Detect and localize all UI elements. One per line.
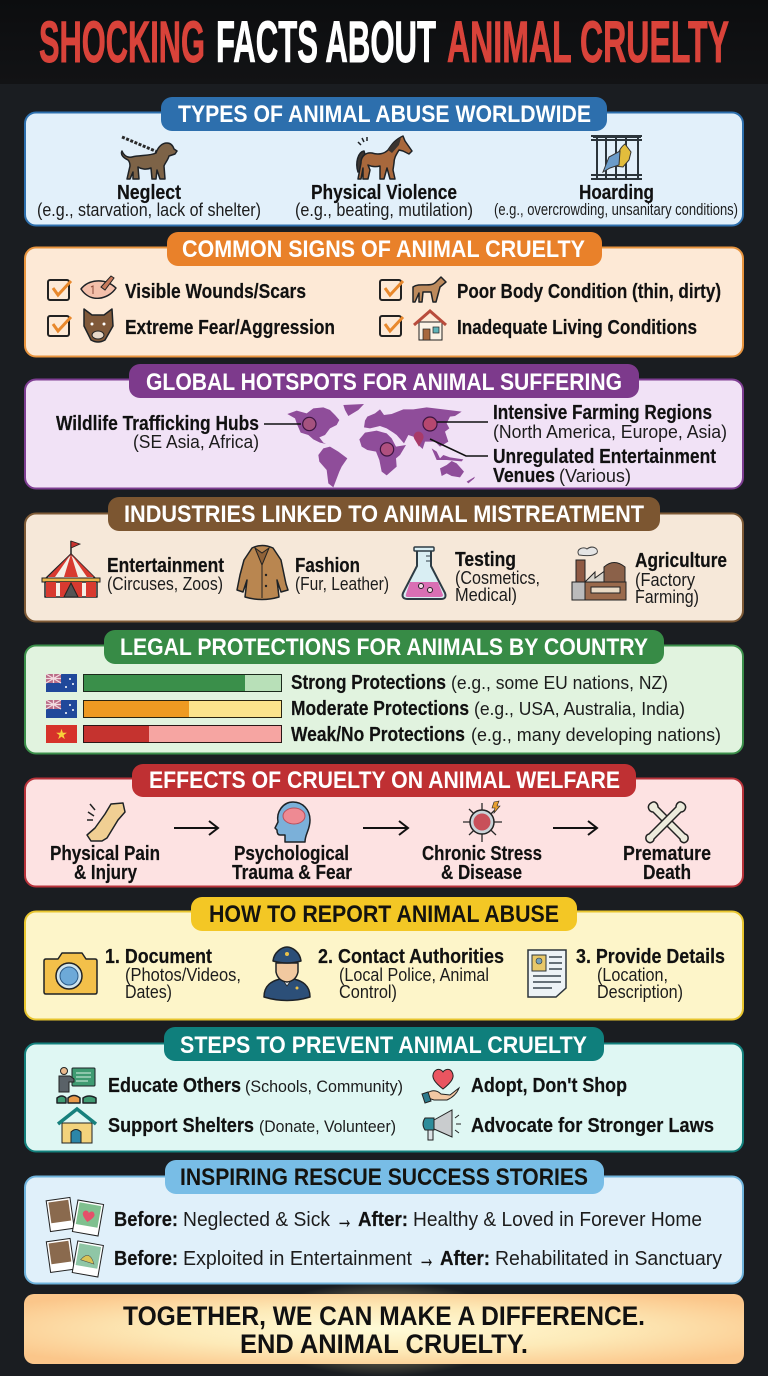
text: weak (291, 724, 721, 746)
text: document: (Photos/Videos, (125, 964, 241, 985)
icon: heart in hand (422, 1069, 459, 1103)
arrow 2 (363, 821, 408, 835)
text: hoarding: Hoarding (579, 182, 654, 204)
icon: caged bird (591, 136, 642, 179)
text: intensive farming: Intensive Farming Regions (493, 402, 712, 424)
text: hoarding (494, 182, 738, 219)
text: premature death: Premature (623, 843, 711, 865)
panel: report (25, 897, 743, 1020)
icon: document form (528, 950, 566, 997)
text: testing: (Cosmetics, (455, 567, 540, 588)
text: psychological (232, 843, 352, 884)
text: educate: (Schools, Community) (245, 1078, 403, 1096)
text: fashion (295, 555, 389, 594)
text: premature death: Death (643, 862, 691, 884)
text: neglect (37, 182, 261, 220)
text: provide details (576, 946, 725, 1002)
text: story 2: → (418, 1242, 435, 1273)
icon: circus tent (42, 541, 100, 597)
text: strong: (e.g., some EU nations, NZ) (451, 672, 668, 693)
text: chronic stress (422, 843, 542, 884)
panel: global hotspots (25, 364, 743, 488)
icon: before and after photos 1 (46, 1197, 104, 1236)
text: testing: Medical) (455, 584, 517, 605)
text: wildlife trafficking: (SE Asia, Africa) (133, 431, 259, 452)
text: wildlife trafficking (56, 413, 259, 452)
icon: megaphone (423, 1110, 461, 1140)
icon: house (414, 311, 446, 340)
arrow 3 (553, 821, 597, 835)
call to action (24, 1282, 744, 1376)
text: entertainment venues: Venues (493, 465, 555, 487)
panel: effects (25, 764, 743, 886)
text: chronic stress: & Disease (441, 862, 522, 884)
panel: common signs (25, 232, 743, 356)
text: story 2: After: (440, 1248, 490, 1270)
text: document: 1. Document (105, 946, 212, 968)
title banner (0, 0, 768, 84)
text: entertainment (107, 555, 224, 594)
icon: thin dog (413, 277, 446, 302)
text: intensive farming: (North America, Europe, Asia) (493, 421, 727, 442)
text: weak: (e.g., many developing nations) (471, 724, 721, 745)
icon: shelter (58, 1109, 96, 1143)
icon: police officer (264, 947, 310, 1000)
text: entertainment: (Circuses, Zoos) (107, 573, 223, 594)
text: psychological: Trauma & Fear (232, 862, 352, 884)
icon: checkbox 2 (48, 316, 71, 336)
call to action: END ANIMAL CRUELTY. (240, 1329, 528, 1359)
text: agriculture (635, 550, 727, 607)
text: story 1: Before: (114, 1209, 178, 1231)
flag: weak (46, 725, 77, 743)
bar: moderate (84, 700, 282, 718)
text: psychological: Psychological (234, 843, 349, 865)
text: story 1: → (336, 1203, 353, 1234)
text: story 1 (114, 1203, 702, 1234)
text: wildlife trafficking: Wildlife Trafficking Hubs (56, 413, 259, 435)
icon: factory (572, 547, 626, 600)
text: physical violence: (e.g., beating, mutilation) (295, 199, 473, 220)
text: wounds: Visible Wounds/Scars (125, 281, 306, 303)
text: moderate: (e.g., USA, Australia, India) (474, 698, 685, 719)
panel: success stories (25, 1160, 743, 1284)
text: support (108, 1115, 396, 1137)
icon: checkbox 1 (48, 280, 71, 300)
heading: report: HOW TO REPORT ANIMAL ABUSE (209, 901, 559, 928)
text: fear: Extreme Fear/Aggression (125, 317, 335, 339)
title banner: SHOCKING (39, 10, 205, 75)
text: contact authorities: (Local Police, Animal (339, 964, 489, 985)
call to action: TOGETHER, WE CAN MAKE A DIFFERENCE. (123, 1301, 645, 1331)
heading: legal: LEGAL PROTECTIONS FOR ANIMALS BY COUNTRY (120, 634, 648, 661)
text: educate: Educate Others (108, 1075, 241, 1097)
text: testing: Testing (455, 549, 516, 571)
text: story 1: After: (358, 1209, 408, 1231)
heading: stories: INSPIRING RESCUE SUCCESS STORIES (180, 1164, 588, 1191)
text: document (105, 946, 241, 1002)
icon: flask (403, 547, 446, 599)
icon: fur coat (237, 546, 288, 600)
icon: crossed bones (646, 802, 688, 843)
panel: legal protections (25, 630, 743, 754)
text: physical pain: Physical Pain (50, 843, 160, 865)
text: entertainment venues: (Various) (559, 465, 631, 486)
text: provide details: Description) (597, 981, 683, 1002)
text: poor body: Poor Body Condition (thin, dirty) (457, 281, 721, 303)
text: strong: Strong Protections (291, 672, 446, 694)
text: fashion: Fashion (295, 555, 360, 577)
text: story 2: Before: (114, 1248, 178, 1270)
text: support: (Donate, Volunteer) (259, 1118, 396, 1136)
flag: weak: ★ (55, 726, 68, 742)
arrow 1 (174, 821, 218, 835)
text: agriculture: Agriculture (635, 550, 727, 572)
text: entertainment: Entertainment (107, 555, 224, 577)
icon: checkbox 3 (380, 280, 403, 300)
text: entertainment venues (493, 446, 716, 487)
text: moderate: Moderate Protections (291, 698, 469, 720)
title banner: FACTS ABOUT (216, 10, 436, 75)
flag: strong (46, 674, 77, 692)
icon: virus stress (463, 801, 502, 842)
panel: prevention steps (25, 1027, 743, 1152)
icon: educate group (57, 1068, 96, 1103)
heading: effects: EFFECTS OF CRUELTY ON ANIMAL WELFARE (149, 767, 620, 794)
heading: signs: COMMON SIGNS OF ANIMAL CRUELTY (182, 236, 585, 263)
text: contact authorities: Control) (339, 981, 397, 1002)
text: strong (291, 672, 668, 694)
text: neglect: (e.g., starvation, lack of shelter) (37, 199, 261, 220)
text: adopt: Adopt, Don't Shop (471, 1075, 627, 1097)
leader lines (264, 422, 488, 456)
text: story 1: Neglected & Sick (183, 1209, 331, 1231)
text: physical violence: Physical Violence (311, 182, 457, 204)
heading: steps: STEPS TO PREVENT ANIMAL CRUELTY (180, 1032, 587, 1059)
text: agriculture: (Factory (635, 569, 696, 590)
world map (287, 404, 475, 487)
text: advocate: Advocate for Stronger Laws (471, 1115, 714, 1137)
icon: camera (44, 953, 97, 994)
text: provide details: (Location, (597, 964, 668, 985)
text: educate (108, 1075, 403, 1097)
text: testing (455, 549, 540, 605)
text: document: Dates) (125, 981, 172, 1002)
icon: injured limb (87, 803, 125, 841)
flag: moderate (46, 700, 77, 718)
text: provide details: 3. Provide Details (576, 946, 725, 968)
text: weak: Weak/No Protections (291, 724, 465, 746)
text: neglect: Neglect (117, 182, 181, 204)
icon: before and after photos 2 (46, 1238, 103, 1277)
heading: hotspots: GLOBAL HOTSPOTS FOR ANIMAL SUFFERING (146, 369, 622, 396)
text: living conditions: Inadequate Living Conditions (457, 317, 697, 339)
text: moderate (291, 698, 685, 720)
icon: head with brain (275, 802, 310, 842)
text: intensive farming (493, 402, 727, 442)
icon: chained dog (121, 137, 177, 179)
icon: checkbox 4 (380, 316, 403, 336)
text: story 2 (114, 1242, 722, 1273)
text: fashion: (Fur, Leather) (295, 573, 389, 594)
bar: strong (84, 674, 282, 692)
text: entertainment venues: Unregulated Entertainment (493, 446, 716, 468)
text: premature death (623, 843, 711, 884)
text: agriculture: Farming) (635, 586, 699, 607)
icon: aggressive dog (84, 309, 113, 342)
bar: weak (84, 726, 282, 742)
heading: types: TYPES OF ANIMAL ABUSE WORLDWIDE (178, 101, 591, 128)
text: contact authorities (318, 946, 504, 1002)
text: story 2: Exploited in Entertainment (183, 1248, 412, 1270)
text: story 1: Healthy & Loved in Forever Home (413, 1209, 702, 1231)
text: story 2: Rehabilitated in Sanctuary (495, 1248, 722, 1270)
icon: injured horse (357, 136, 412, 179)
heading: industries: INDUSTRIES LINKED TO ANIMAL MISTREATMENT (124, 501, 644, 528)
text: physical pain (50, 843, 160, 884)
text: support: Support Shelters (108, 1115, 254, 1137)
icon: wound (81, 276, 116, 298)
text: contact authorities: 2. Contact Authorities (318, 946, 504, 968)
text: physical violence (295, 182, 473, 220)
panel: industries (25, 497, 743, 622)
text: physical pain: & Injury (74, 862, 138, 884)
text: chronic stress: Chronic Stress (422, 843, 542, 865)
panel: types of animal abuse (25, 97, 743, 226)
